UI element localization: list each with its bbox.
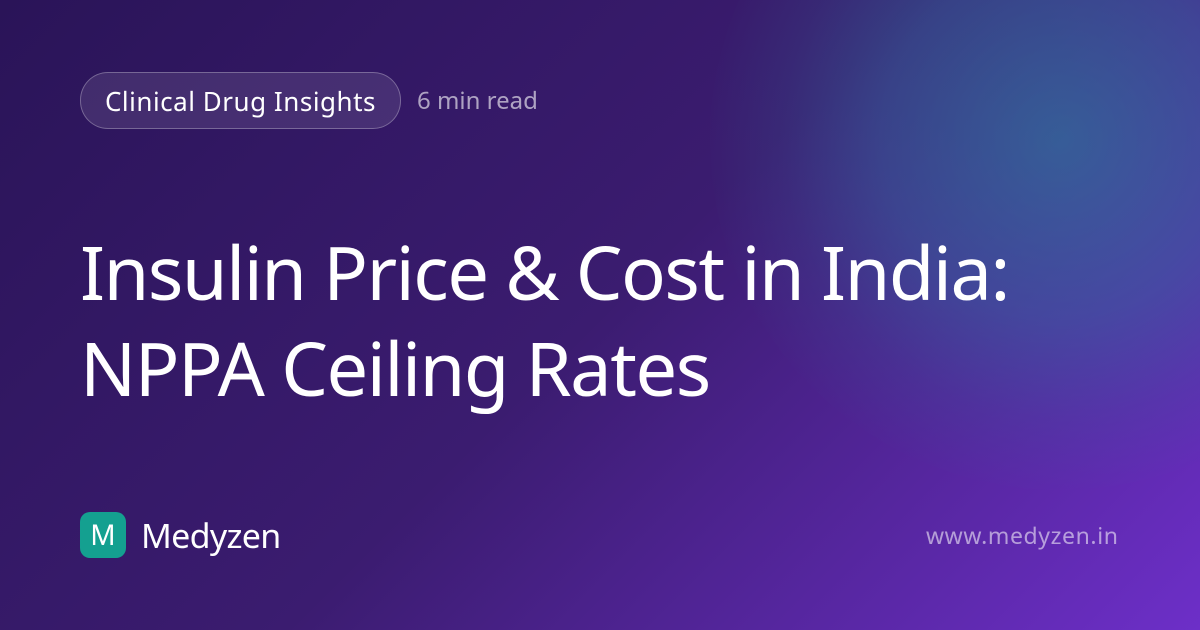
teal corner glow — [710, 0, 1200, 490]
website url: www.medyzen.in — [926, 519, 1119, 551]
title: Insulin Price & Cost in India: — [80, 221, 1009, 322]
read time: 6 min read — [417, 84, 538, 117]
category badge: Clinical Drug Insights — [105, 83, 376, 119]
title — [80, 221, 1009, 418]
title: NPPA Ceiling Rates — [80, 317, 710, 418]
icon: Medyzen logo — [80, 512, 126, 558]
brand name: Medyzen — [141, 512, 281, 558]
icon: Medyzen logo: M — [90, 516, 116, 554]
category badge — [80, 72, 401, 129]
